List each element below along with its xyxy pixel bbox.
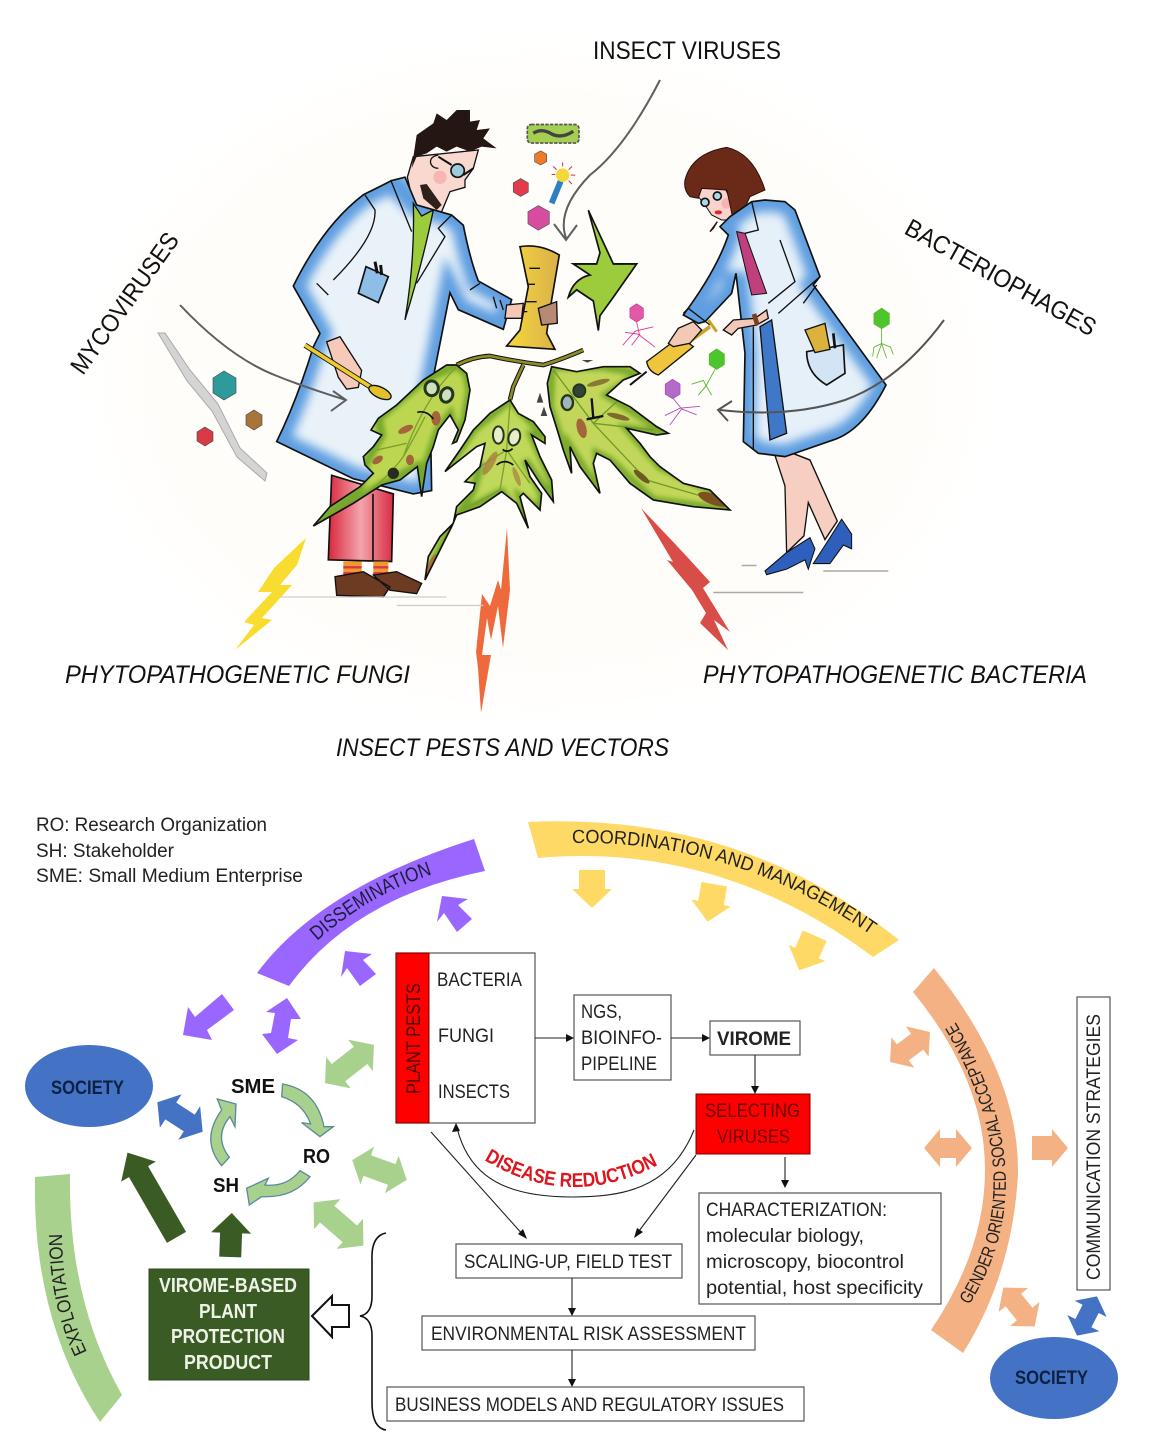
phage: purple: [665, 379, 700, 425]
mycovirus particles: [197, 371, 262, 446]
coat lines: [683, 202, 820, 450]
band: dissemination: DISSEMINATION: [309, 862, 431, 940]
cheek: [721, 198, 732, 209]
glasses: [438, 157, 473, 175]
band: dissemination: [257, 839, 485, 986]
orange arrows: [879, 1017, 1068, 1338]
rod virus: [552, 181, 561, 203]
lightning: bacteria (red): [641, 508, 730, 650]
cylinder ticks: [523, 268, 540, 312]
coat pocket: [807, 345, 845, 385]
phage: pink: [623, 304, 655, 347]
woman scientist: [630, 147, 886, 457]
society ellipse: right: [990, 1337, 1118, 1419]
illustration: two scientists and sick plant: [158, 80, 944, 713]
label: insect viruses: INSECT VIRUSES: [593, 37, 781, 65]
product box: [149, 1269, 309, 1380]
hair: [685, 147, 765, 222]
NGS box: BIOINFO-: [581, 1028, 662, 1049]
shoes: [335, 572, 422, 597]
arrow: mycoviruses (grey): [180, 305, 346, 411]
connector arrowheads: [452, 1034, 789, 1387]
NGS box: NGS,: [581, 1002, 622, 1023]
NGS box: PIPELINE: [581, 1054, 657, 1075]
man: face: [407, 150, 478, 217]
blue double arrow: society to communication: [1061, 1288, 1113, 1344]
hand on cylinder: [505, 303, 523, 318]
hair: [412, 110, 497, 168]
brace: [360, 1233, 386, 1430]
dark green arrow to SH: [210, 1212, 252, 1258]
characterization box: molecular biology,: [706, 1226, 864, 1247]
characterization box: microscopy, biocontrol: [706, 1252, 904, 1273]
band: gender oriented social acceptance: GENDER ORIENTED SOCIAL ACCEPTANCE: [945, 1022, 1006, 1302]
band: gender oriented social acceptance: [913, 968, 1018, 1353]
hair curl: [710, 222, 717, 232]
flow connectors: [431, 1038, 785, 1383]
rod virus spikes: [552, 162, 575, 184]
scaling-up box: [456, 1244, 682, 1278]
band: exploitation: EXPLOITATION: [48, 1235, 86, 1356]
tear drops: [537, 360, 593, 416]
selecting viruses box: [696, 1094, 810, 1154]
product box: PLANT: [199, 1301, 257, 1323]
bacterium: [527, 124, 579, 143]
virome box: VIROME: [717, 1029, 791, 1050]
syringe: [630, 320, 717, 385]
characterization box: potential, host specificity: [706, 1278, 924, 1299]
coat pocket: [358, 267, 388, 303]
coat: [683, 200, 886, 457]
virome box: [710, 1021, 800, 1055]
coat lines: [317, 180, 503, 310]
face: [698, 188, 737, 220]
NGS box: [574, 995, 671, 1080]
plant pests box: INSECTS: [438, 1082, 510, 1103]
legend: SME: Small Medium Enterprise: [36, 866, 303, 887]
socks: [343, 562, 388, 578]
paper background of illustration: [120, 70, 960, 690]
arrow: insect viruses (grey): [554, 80, 660, 240]
graduated cylinder: [507, 246, 559, 349]
band: coordination and management: [528, 821, 899, 957]
small cylinder in pocket: [805, 323, 830, 353]
yellow arrows: [572, 870, 833, 978]
label: bacteriophages: BACTERIOPHAGES: [900, 214, 1101, 342]
man scientist: body: [277, 177, 512, 605]
watch: [754, 314, 757, 325]
label: phytopathogenetic bacteria: PHYTOPATHOGENETIC BACTERIA: [703, 661, 1087, 689]
phage: green left: [692, 349, 724, 395]
scaling-up box: SCALING-UP, FIELD TEST: [464, 1252, 672, 1273]
communication strategies box: [1077, 997, 1110, 1290]
product box: PROTECTION: [171, 1326, 285, 1348]
middle leaf: [423, 400, 553, 581]
product box: PRODUCT: [184, 1352, 272, 1374]
pen: [833, 333, 835, 348]
phage: green right: [873, 308, 893, 358]
green double arrows: [300, 1029, 414, 1261]
bacterium inner: [533, 131, 573, 136]
SME RO SH cycle: RO: [303, 1146, 330, 1168]
blue skirt: [760, 320, 787, 440]
top sprout leaves: [568, 210, 637, 330]
hand on syringe: [668, 322, 702, 347]
free hand: [723, 310, 768, 335]
lightning: fungi (yellow): [235, 538, 306, 650]
plant pests box: [396, 953, 535, 1123]
blue double arrow: society to SME: [146, 1086, 214, 1148]
environmental risk box: ENVIRONMENTAL RISK ASSESSMENT: [431, 1324, 746, 1345]
business models box: [387, 1387, 804, 1421]
shoes: [765, 519, 852, 575]
left leaf: [313, 365, 470, 526]
selecting viruses box: VIRUSES: [717, 1127, 790, 1148]
sprout and phages: [568, 210, 893, 425]
SME RO SH cycle: [211, 1076, 333, 1205]
legs: [772, 445, 837, 552]
communication strategies box: COMMUNICATION STRATEGIES: [1084, 1014, 1105, 1280]
right leaf: [547, 367, 730, 510]
sock stripes: [343, 567, 388, 573]
floor shadow: [280, 597, 483, 605]
pens: [375, 262, 382, 275]
arrow: bacteriophages (grey): [718, 320, 944, 421]
SME RO SH cycle: SME: [231, 1076, 275, 1098]
disease reduction label: DISEASE REDUCTION: [485, 1148, 657, 1188]
band: coordination and management: COORDINATION AND MANAGEMENT: [572, 830, 878, 932]
plant pests box: BACTERIA: [437, 970, 522, 991]
ear: [430, 155, 438, 168]
characterization box: [699, 1193, 941, 1304]
plant pests box: FUNGI: [438, 1026, 494, 1047]
cheek: [433, 171, 447, 184]
product box: VIROME-BASED: [159, 1275, 297, 1297]
SME RO SH cycle: SH: [213, 1175, 239, 1197]
legend: [36, 815, 303, 887]
label: phytopathogenetic fungi: PHYTOPATHOGENETIC FUNGI: [65, 661, 410, 689]
woman: legs and shoes: [713, 445, 888, 592]
floor shadows: [713, 565, 888, 592]
man: head, collar, pocket and cylinder details: [317, 110, 559, 349]
society ellipse: left: [25, 1045, 153, 1127]
branch: [457, 350, 583, 400]
label: mycoviruses: MYCOVIRUSES: [65, 227, 185, 379]
selecting viruses box: SELECTING: [705, 1101, 800, 1122]
band: exploitation: [34, 1174, 122, 1422]
society ellipse: right: SOCIETY: [1015, 1368, 1088, 1389]
rod virus head: [556, 168, 569, 182]
beard: [420, 184, 442, 210]
business models box: BUSINESS MODELS AND REGULATORY ISSUES: [395, 1395, 784, 1416]
blouse: [737, 232, 767, 295]
environmental risk box: [422, 1316, 755, 1350]
sick plant: branch and three leaves: [313, 350, 730, 581]
virus particles: [513, 151, 549, 230]
white arrow to product: [312, 1296, 349, 1337]
plant pests box: PLANT PESTS: [404, 983, 425, 1094]
characterization box: CHARACTERIZATION:: [706, 1200, 887, 1221]
legend: RO: Research Organization: [36, 815, 267, 836]
left forearm: [327, 337, 362, 389]
purple arrows: [183, 896, 472, 1054]
lips: [715, 210, 722, 214]
grey ribbon: [158, 333, 267, 481]
lightning: insects (orange): [476, 528, 510, 713]
society ellipse: left: SOCIETY: [51, 1078, 124, 1099]
viruses above plant: [513, 124, 579, 230]
legend: SH: Stakeholder: [36, 841, 175, 862]
shirt: [405, 203, 433, 320]
dark green arrow to society: [110, 1143, 194, 1247]
lab coat: [277, 177, 512, 494]
fingers: [538, 302, 557, 325]
yellow spoon: [305, 345, 377, 391]
glasses: [701, 192, 721, 206]
trousers: [328, 475, 393, 562]
label: insect pests and vectors: INSECT PESTS AND VECTORS: [336, 734, 669, 762]
